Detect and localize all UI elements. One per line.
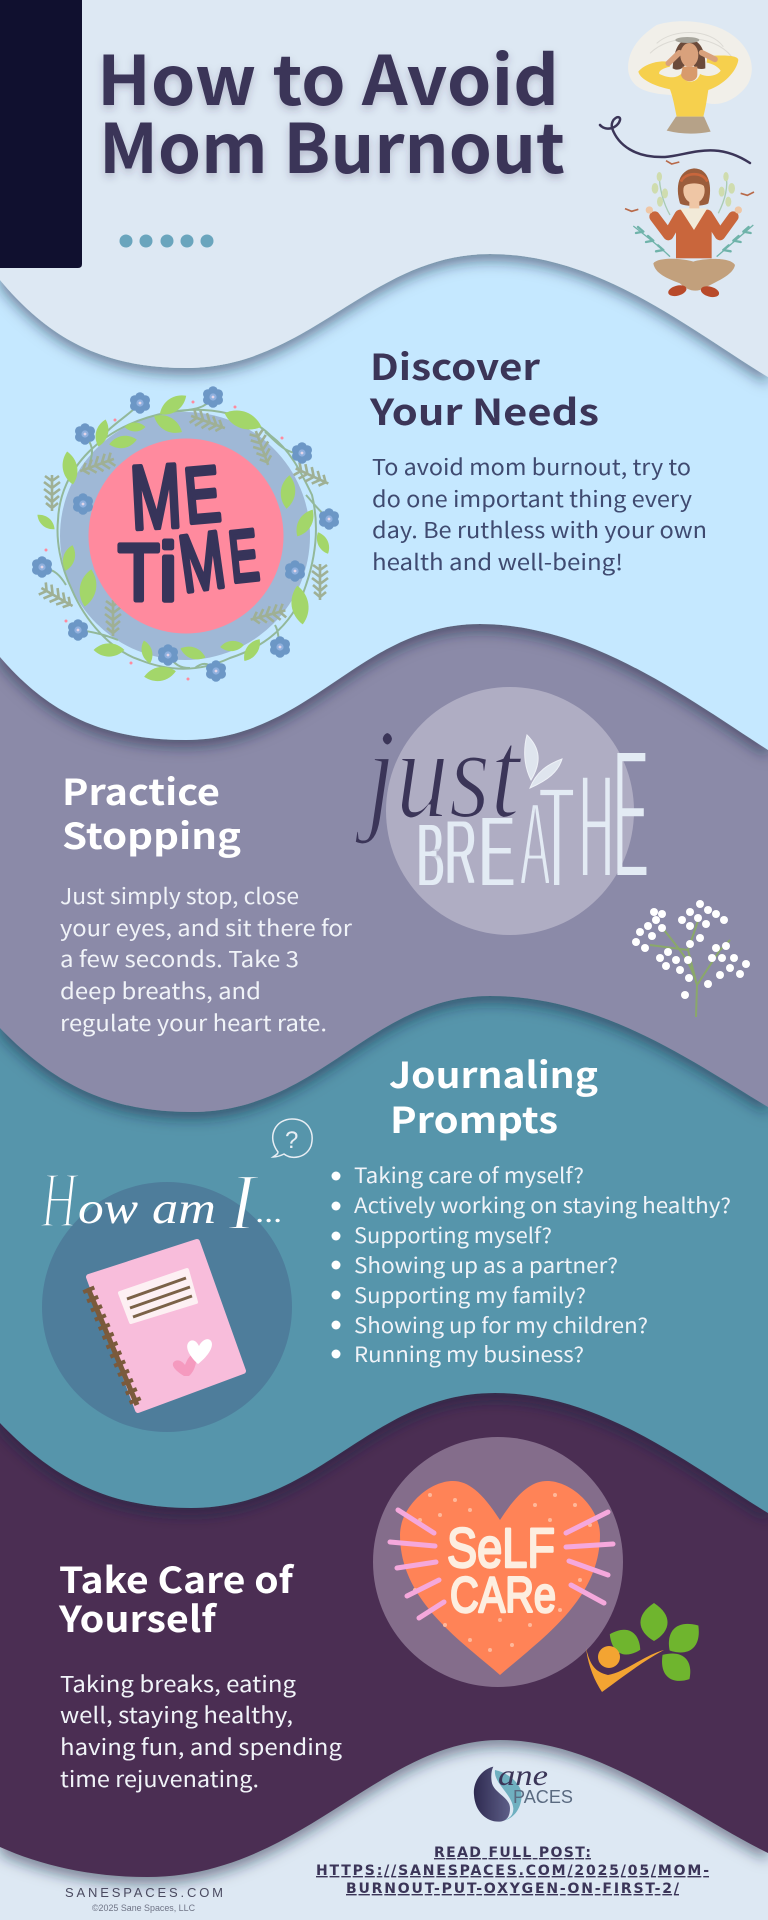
heading: journaling prompts: Prompts xyxy=(390,1092,558,1144)
logo: sane spaces: ane xyxy=(498,1759,548,1792)
script: how am I xyxy=(40,1156,283,1247)
heading: journaling prompts: Journaling xyxy=(389,1047,598,1099)
panel: practice stopping xyxy=(0,0,768,1112)
illustration: me time wreath: T xyxy=(118,528,160,617)
list: journaling prompts xyxy=(332,1160,731,1369)
illustration: me time wreath: E xyxy=(181,451,224,540)
text: take care body: time rejuvenating. xyxy=(60,1762,259,1794)
text: discover your needs body: do one important thing every xyxy=(372,482,693,514)
heading: practice stopping: Practice xyxy=(62,764,220,816)
text: take care body: having fun, and spending xyxy=(60,1730,343,1762)
call to action: read full post: BURNOUT-PUT-OXYGEN-ON-FIRST-2/ xyxy=(346,1881,680,1897)
script: how am I: I xyxy=(227,1159,260,1247)
panel: discover your needs xyxy=(0,0,768,750)
list: journaling prompts: Showing up as a partner? xyxy=(354,1250,618,1280)
text: take care body: Taking breaks, eating xyxy=(60,1667,297,1699)
illustration: me time wreath xyxy=(32,386,339,684)
script: how am I: ... xyxy=(256,1196,283,1229)
list: journaling prompts: Actively working on staying healthy? xyxy=(354,1190,731,1220)
text: discover your needs body: health and well-being! xyxy=(372,545,623,577)
heading: journaling prompts xyxy=(389,1047,598,1144)
decorative dots xyxy=(120,234,214,248)
heading: take care of yourself: Yourself xyxy=(58,1591,218,1643)
list: journaling prompts: Taking care of myself? xyxy=(354,1160,584,1190)
illustration: just breathe xyxy=(354,687,649,935)
logo: sane spaces: PACES xyxy=(513,1787,573,1807)
illustration: just breathe: B xyxy=(417,805,444,905)
logo: sane spaces xyxy=(474,1759,573,1822)
list: journaling prompts: Supporting my family? xyxy=(354,1280,586,1310)
footer: website: SANESPACES.COM xyxy=(65,1885,223,1900)
panel: journaling prompts xyxy=(0,0,768,1513)
text: practice stopping body: Just simply stop, close xyxy=(60,879,299,911)
text: take care body xyxy=(60,1667,343,1794)
illustration: just breathe: A xyxy=(520,776,551,913)
text: discover your needs body xyxy=(372,450,707,577)
illustration: me time wreath: E xyxy=(225,514,262,598)
icon: question bubble xyxy=(273,1119,312,1157)
illustration: just breathe: E xyxy=(479,795,515,907)
circle behind notebook xyxy=(42,1182,292,1432)
illustration: me time wreath: M xyxy=(174,516,230,610)
heading: discover your needs: Discover xyxy=(370,339,540,391)
text: discover your needs body: To avoid mom burnout, try to xyxy=(372,450,691,482)
heading: take care of yourself: Take Care of xyxy=(59,1552,295,1604)
title: Mom Burnout xyxy=(99,94,565,193)
icon: question bubble: ? xyxy=(285,1127,298,1154)
text: practice stopping body: regulate your heart rate. xyxy=(60,1006,327,1038)
illustration: just breathe: H xyxy=(579,742,614,910)
heading: discover your needs: Your Needs xyxy=(369,384,599,436)
list: journaling prompts: Showing up for my children? xyxy=(354,1310,648,1340)
dark corner block xyxy=(0,0,82,268)
script: how am I: ow xyxy=(78,1184,139,1233)
illustration: just breathe: E xyxy=(613,711,649,919)
text: practice stopping body xyxy=(60,879,352,1038)
title: How to Avoid xyxy=(97,26,559,125)
illustration: just breathe: R xyxy=(445,802,476,904)
title xyxy=(97,26,565,193)
call to action: read full post: READ FULL POST: xyxy=(434,1845,591,1861)
squiggle arrow xyxy=(600,117,750,163)
text: practice stopping body: your eyes, and sit there for xyxy=(60,911,352,943)
icon: wellness logo xyxy=(586,1603,707,1692)
icon: baby's breath flower xyxy=(632,900,750,1017)
text: discover your needs body: day. Be ruthless with your own xyxy=(372,513,707,545)
text: practice stopping body: deep breaths, and xyxy=(60,974,261,1006)
illustration: just breathe: just xyxy=(354,703,523,845)
text: take care body: well, staying healthy, xyxy=(60,1698,293,1730)
heading: discover your needs xyxy=(369,339,599,436)
icon: meditating woman xyxy=(625,161,754,299)
list: journaling prompts: Supporting myself? xyxy=(354,1220,552,1250)
footer: copyright: ©2025 Sane Spaces, LLC xyxy=(92,1903,195,1914)
script: how am I: am xyxy=(152,1184,216,1233)
heading: take care of yourself xyxy=(58,1552,295,1643)
heading: practice stopping xyxy=(62,764,241,860)
icon: notebook xyxy=(88,1242,243,1410)
call to action: read full post xyxy=(316,1845,709,1897)
illustration: me time wreath: M xyxy=(128,446,184,549)
text: practice stopping body: a few seconds. Take 3 xyxy=(60,942,299,974)
script: how am I: H xyxy=(40,1156,79,1243)
illustration: just breathe: T xyxy=(539,755,574,920)
illustration: self care heart: SeLF xyxy=(447,1516,555,1579)
icon: stressed woman xyxy=(628,21,752,134)
illustration: self care heart: CARe xyxy=(450,1567,556,1623)
call to action: read full post: HTTPS://SANESPACES.COM/2025/05/MOM- xyxy=(316,1863,709,1879)
illustration: me time wreath: i xyxy=(159,527,177,618)
list: journaling prompts: Running my business? xyxy=(354,1339,584,1369)
illustration: self care heart xyxy=(373,1437,623,1687)
panel: header xyxy=(0,0,768,377)
heading: practice stopping: Stopping xyxy=(62,808,241,860)
